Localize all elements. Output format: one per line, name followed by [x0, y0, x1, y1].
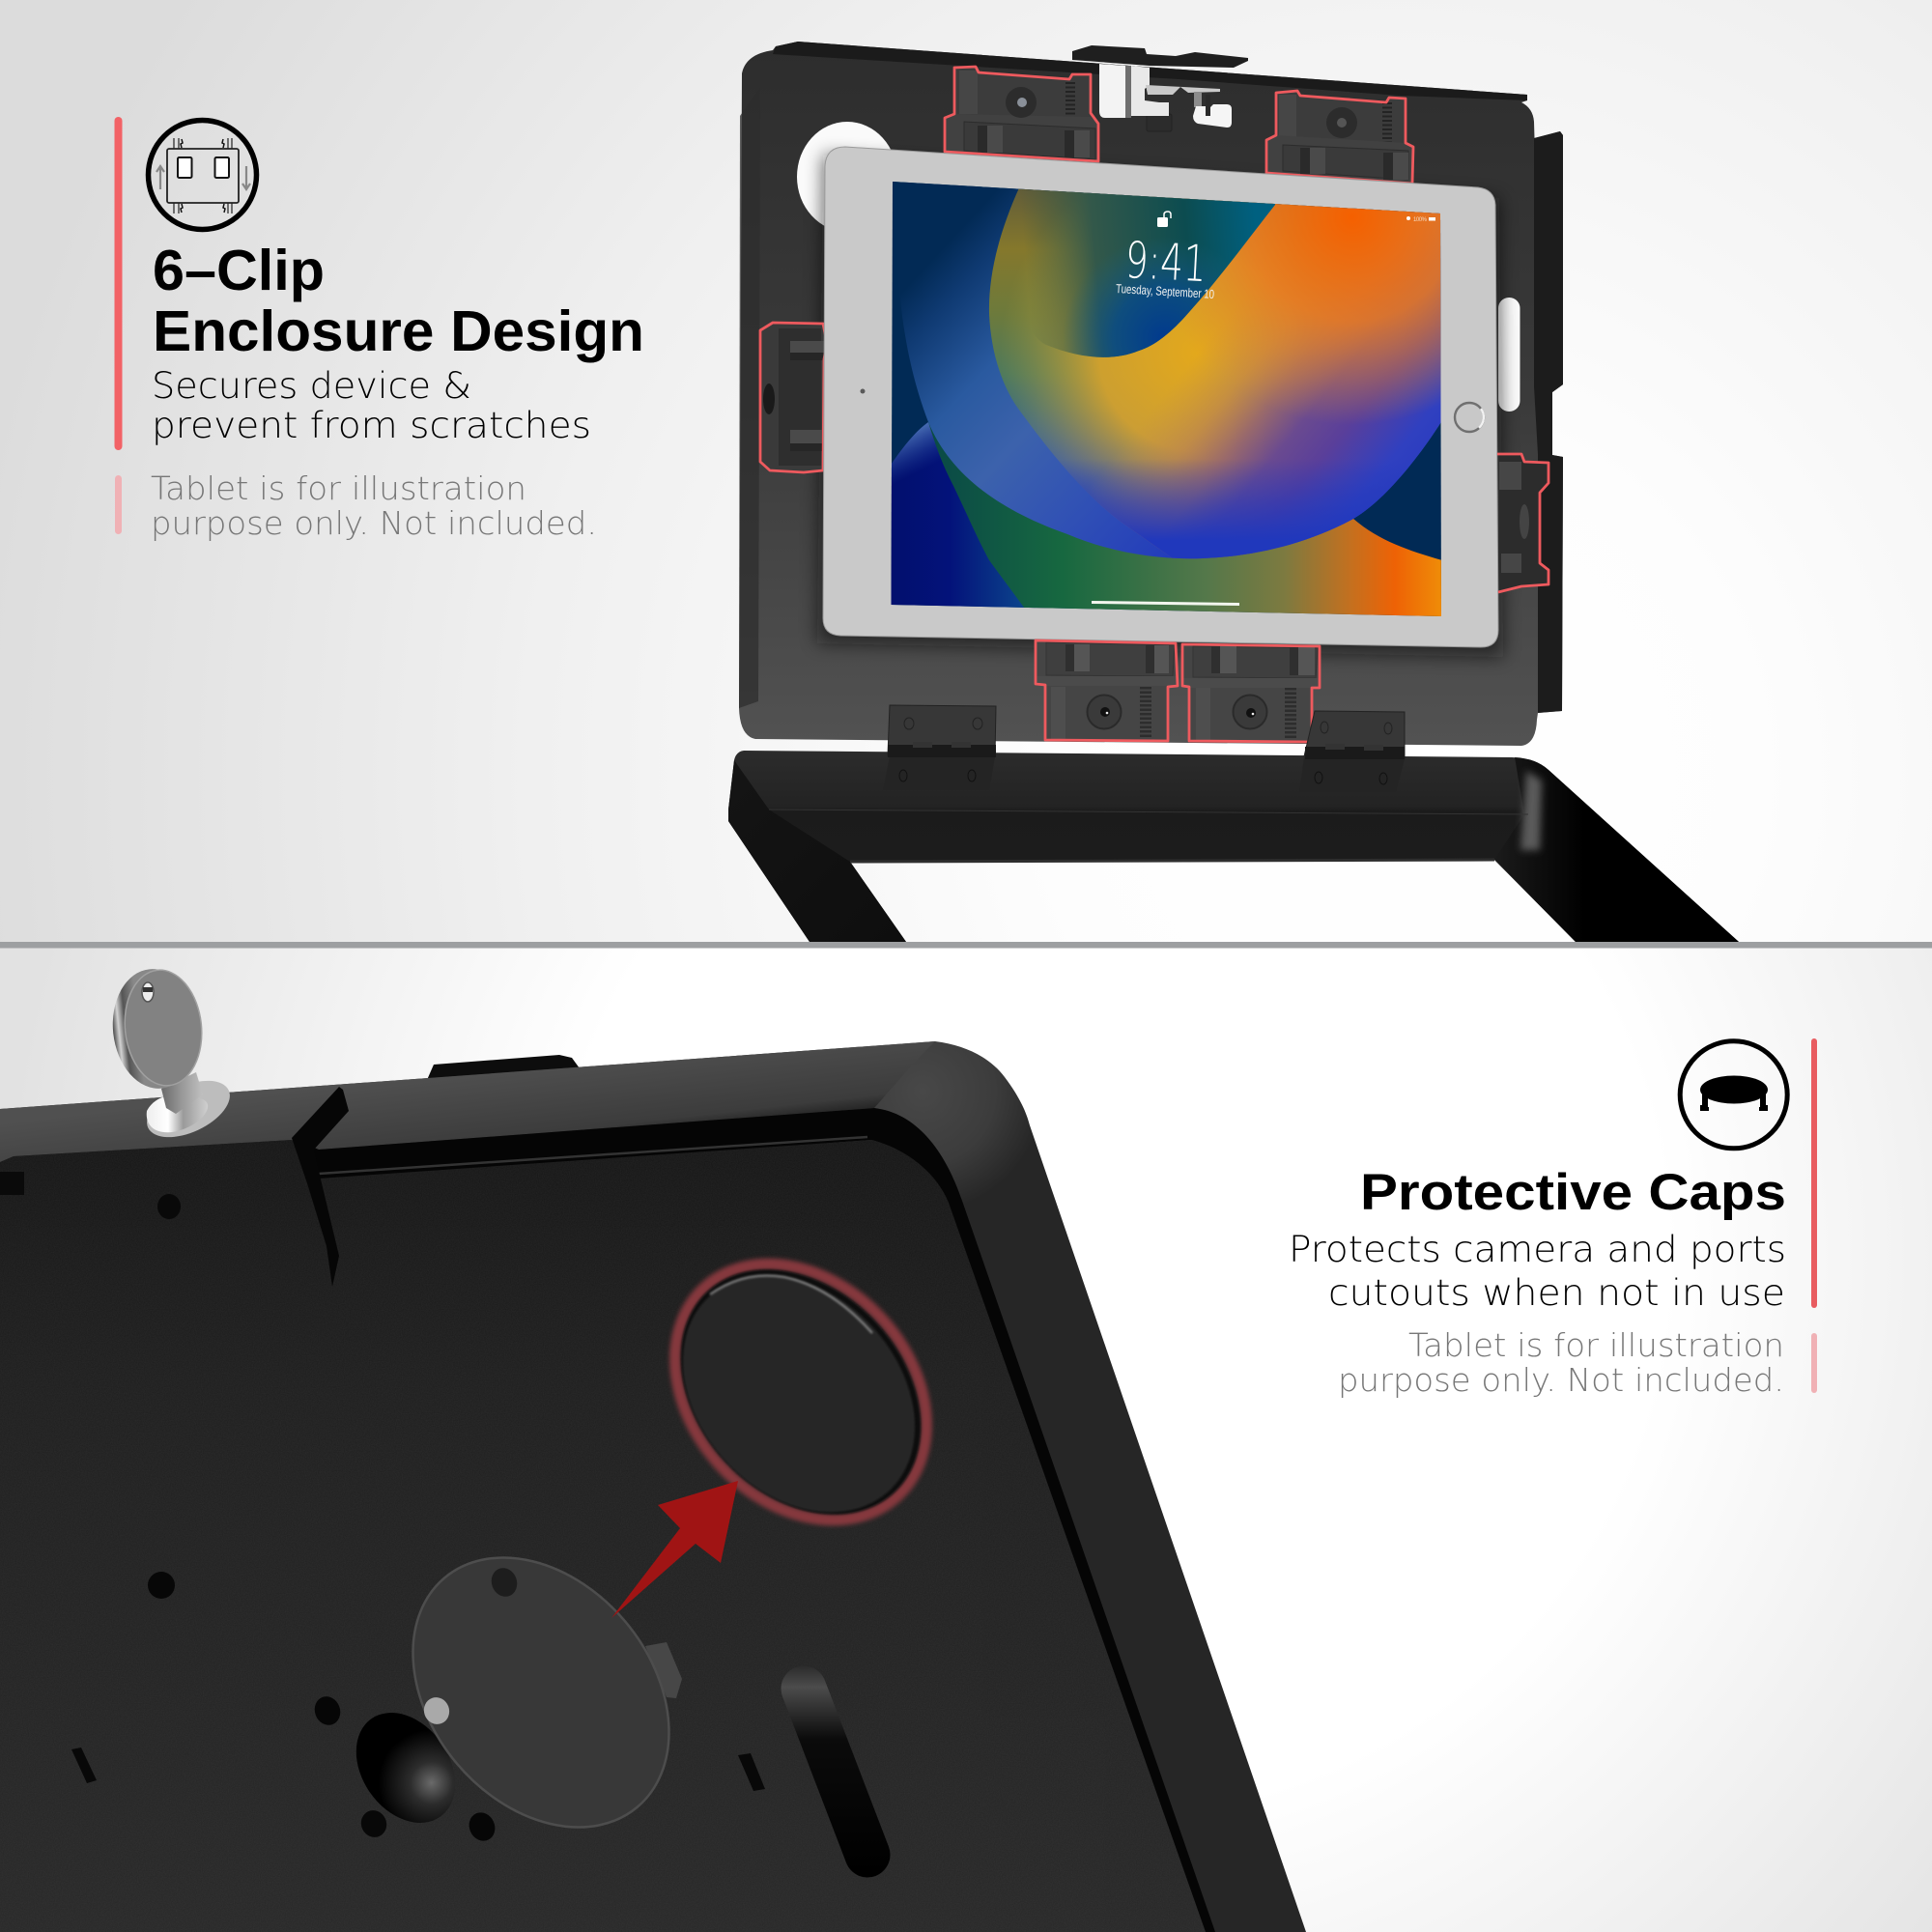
stand base: [728, 751, 1739, 942]
panel: bottom background: [0, 947, 1932, 1932]
lock tab gap: [292, 1087, 349, 1287]
tablet screen wallpaper: [884, 174, 1449, 623]
left flange: [739, 87, 760, 708]
callout: protective caps: [1289, 1038, 1817, 1399]
note accent bar: [115, 475, 122, 534]
clip: bottom right: [1182, 644, 1320, 742]
note: purpose only. Not included.: [1338, 1361, 1784, 1399]
description: cutouts when not in use: [1328, 1272, 1785, 1314]
black recess: [292, 1108, 1215, 1932]
highlighted installed cap: [624, 1213, 978, 1571]
inner plate: [0, 1140, 1206, 1932]
plate texture: [0, 1157, 1065, 1793]
latch assembly: [1072, 45, 1248, 131]
plate holes: [71, 1194, 867, 1855]
description: Protects camera and ports: [1289, 1229, 1786, 1270]
home indicator: [1092, 601, 1239, 606]
description: Secures device &: [152, 365, 471, 407]
note accent bar: [1811, 1333, 1817, 1393]
divider between panels: [0, 942, 1932, 949]
accent bar: [114, 117, 122, 450]
clip: top right: [1266, 91, 1413, 184]
white side slot: [1498, 298, 1520, 412]
recess highlight: [319, 1137, 867, 1174]
clip: bottom left: [1036, 640, 1178, 741]
callout: 6-clip enclosure design: [114, 117, 644, 542]
top lip: [773, 42, 1527, 100]
photo: tablet enclosure stand: [728, 42, 1739, 942]
arrow: [611, 1481, 738, 1618]
knob: [1088, 696, 1121, 728]
heading: Protective Caps: [1360, 1164, 1786, 1221]
hinge: right: [1299, 711, 1405, 792]
knob: [1326, 107, 1357, 138]
lock screen date: Tuesday, September 10: [1116, 281, 1214, 301]
loose protective cap: [360, 1507, 722, 1878]
photo: enclosure close-up: [0, 965, 1306, 1932]
icon: enclosure with clips: [149, 120, 257, 230]
knob: [1233, 696, 1267, 728]
knob: [1006, 87, 1037, 118]
heading: Enclosure Design: [153, 299, 644, 363]
panel: top background: [0, 0, 1932, 943]
clip: right: [1497, 454, 1548, 592]
bezel: [0, 1041, 1306, 1932]
description: prevent from scratches: [152, 405, 591, 446]
white camera cutout: [797, 122, 897, 232]
note: purpose only. Not included.: [151, 504, 597, 542]
accent bar: [1811, 1038, 1817, 1308]
lock screen time: 9:41: [1123, 232, 1208, 294]
rear nub: [427, 1055, 580, 1087]
clip: left: [760, 323, 827, 472]
top bezel face: [0, 1041, 935, 1162]
heading: 6–Clip: [153, 239, 325, 302]
note: Tablet is for illustration: [1408, 1326, 1784, 1364]
status bar: [1406, 216, 1435, 221]
edge notch: [0, 1172, 24, 1195]
hinge: left: [883, 705, 996, 790]
tablet camera: [860, 388, 866, 394]
right flange: [1534, 131, 1563, 713]
status bar: 100%: [1413, 217, 1428, 223]
tablet shadow: [817, 155, 1503, 657]
tablet body: [823, 147, 1498, 647]
key: [107, 965, 239, 1149]
icon: protective cap: [1680, 1041, 1787, 1149]
lock icon: [1157, 212, 1171, 227]
tablet home button: [1455, 403, 1484, 432]
enclosure back plate: [739, 42, 1563, 746]
note: Tablet is for illustration: [151, 469, 526, 507]
clip: top left: [945, 67, 1098, 161]
